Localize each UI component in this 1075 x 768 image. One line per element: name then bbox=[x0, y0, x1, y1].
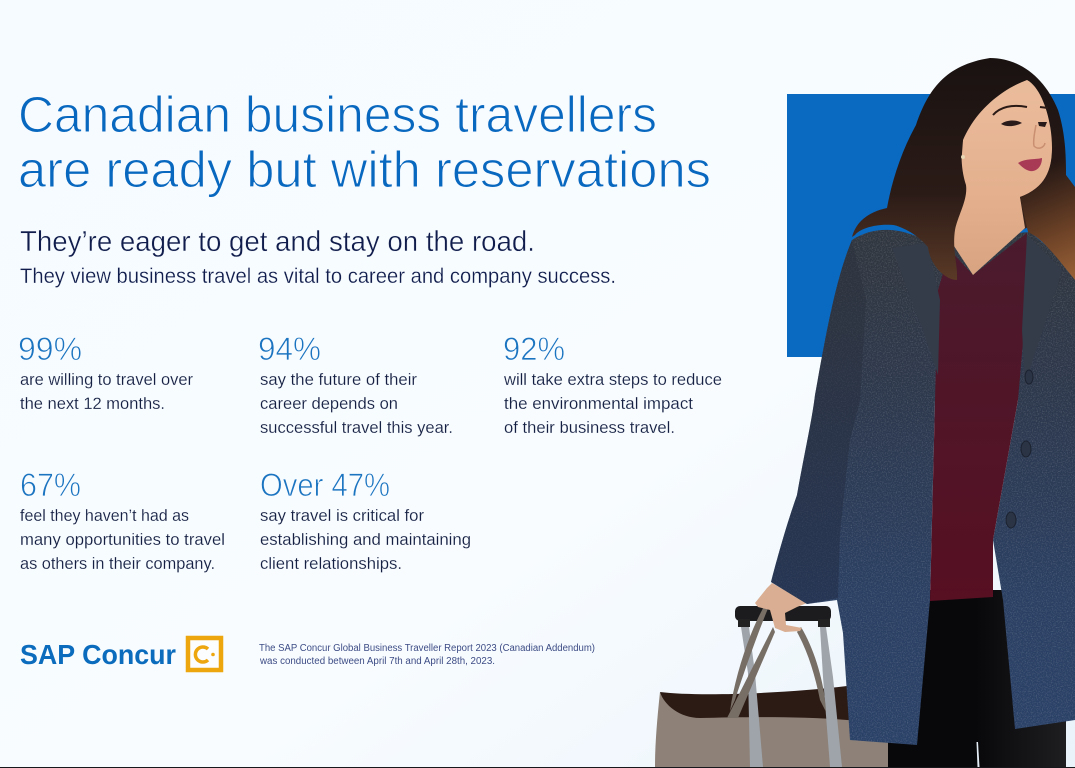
coat lapels bbox=[892, 235, 1062, 385]
intro sentence: They view business travel as vital to career and company success. bbox=[20, 265, 616, 288]
stat: 92%: the environmental impact bbox=[504, 394, 693, 413]
neck and face bbox=[950, 80, 1052, 275]
shirt bbox=[930, 233, 1027, 601]
blue rectangle behind person bbox=[787, 94, 1075, 357]
stat: 67%: feel they haven’t had as bbox=[20, 506, 189, 525]
stat: 67%: as others in their company. bbox=[20, 554, 215, 573]
facial features bbox=[961, 106, 1048, 171]
stat: 94% bbox=[258, 331, 453, 437]
stat: over 47%: Over 47% bbox=[260, 467, 390, 503]
subheading: They’re eager to get and stay on the road. bbox=[20, 226, 535, 258]
stat: 94%: say the future of their bbox=[260, 370, 417, 389]
footnote bbox=[259, 643, 595, 667]
stat: 94%: 94% bbox=[258, 331, 321, 367]
stat: over 47% bbox=[260, 467, 471, 573]
stat: 99%: the next 12 months. bbox=[20, 394, 165, 413]
title bbox=[18, 86, 711, 198]
trousers bbox=[888, 590, 1066, 767]
SAP Concur logo: SAP Concur bbox=[20, 639, 176, 670]
stat: 92%: 92% bbox=[503, 331, 565, 367]
bag straps bbox=[727, 603, 826, 718]
stat: 92%: of their business travel. bbox=[504, 418, 675, 437]
tote bag bbox=[655, 686, 888, 767]
footnote: was conducted between April 7th and April 28th, 2023. bbox=[259, 656, 495, 667]
left hair lock bbox=[887, 130, 966, 280]
stat: 94%: career depends on bbox=[260, 394, 398, 413]
stat: 67%: 67% bbox=[20, 467, 81, 503]
footnote: The SAP Concur Global Business Traveller Report 2023 (Canadian Addendum) bbox=[259, 643, 595, 654]
bottom edge line bbox=[0, 767, 1075, 768]
title: are ready but with reservations bbox=[18, 141, 711, 198]
stat: 92% bbox=[503, 331, 722, 437]
suitcase handle bbox=[735, 606, 831, 627]
hand bbox=[755, 583, 807, 632]
stat: 67%: many opportunities to travel bbox=[20, 530, 225, 549]
overcoat bbox=[771, 230, 1075, 745]
suitcase rods bbox=[741, 627, 842, 767]
title: Canadian business travellers bbox=[18, 86, 657, 143]
stat: 67% bbox=[20, 467, 225, 573]
stat: over 47%: client relationships. bbox=[260, 554, 402, 573]
coat buttons bbox=[1006, 370, 1033, 528]
stat: over 47%: establishing and maintaining bbox=[260, 530, 471, 549]
stat: 99%: 99% bbox=[18, 331, 82, 367]
stat: 99%: are willing to travel over bbox=[20, 370, 193, 389]
stat: 99% bbox=[18, 331, 193, 413]
right hair bbox=[1020, 140, 1075, 280]
stat: over 47%: say travel is critical for bbox=[260, 506, 424, 525]
sleeve shading bbox=[771, 240, 866, 604]
back hair bbox=[852, 58, 1066, 240]
photo: travelling businesswoman with bag and suitcase bbox=[655, 58, 1075, 767]
stat: 94%: successful travel this year. bbox=[260, 418, 453, 437]
gap between legs bbox=[976, 742, 980, 767]
stat: 92%: will take extra steps to reduce bbox=[503, 370, 722, 389]
